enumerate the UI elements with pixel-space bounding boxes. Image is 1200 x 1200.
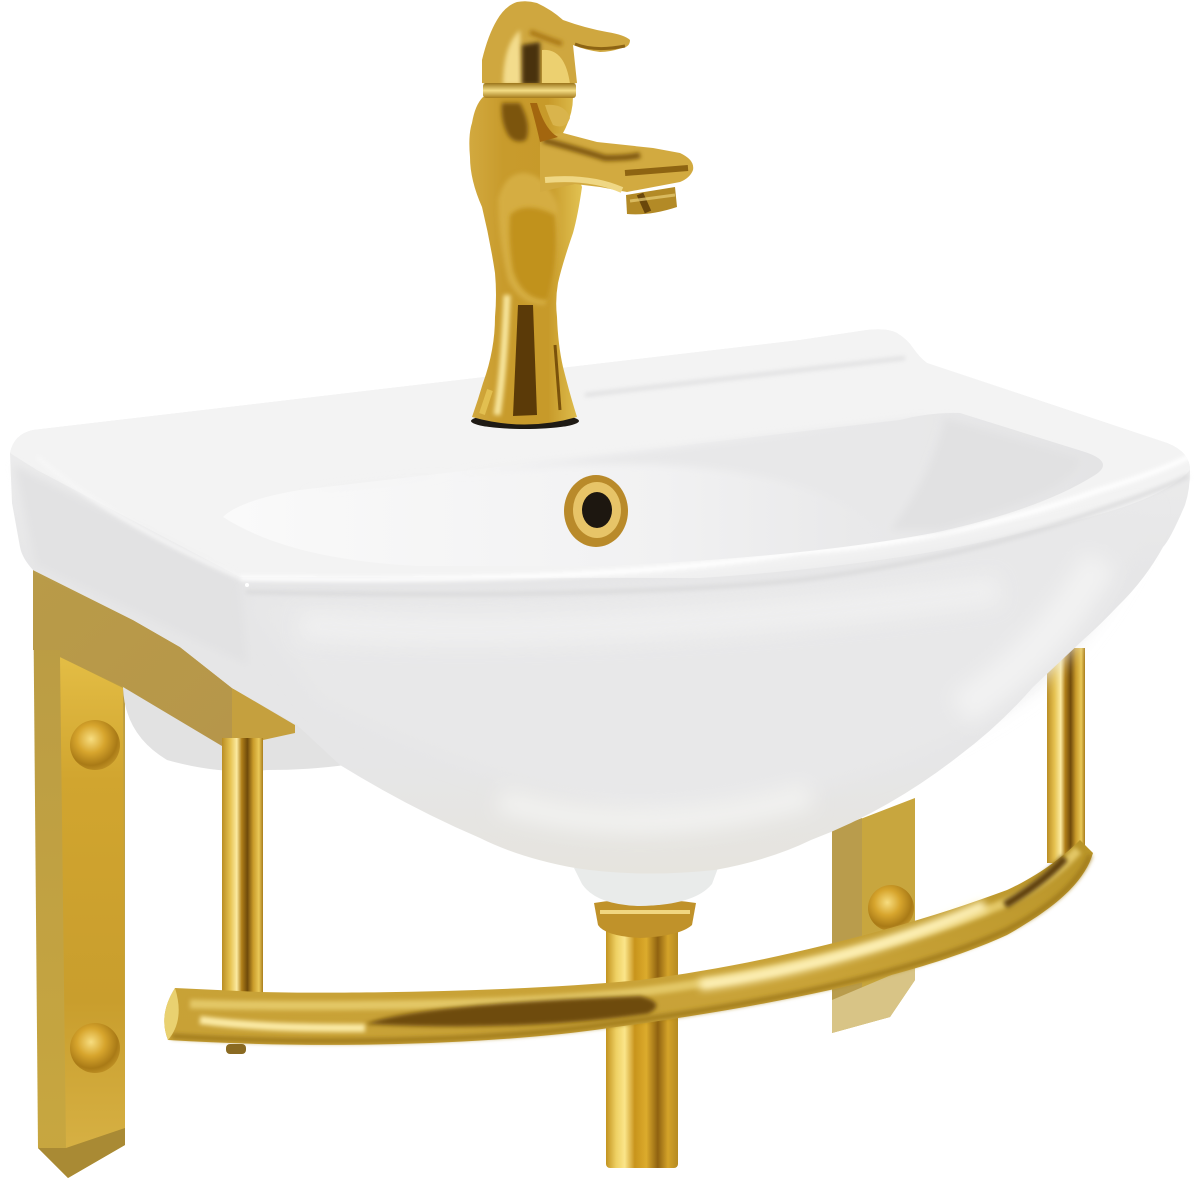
right vertical rod xyxy=(1047,648,1085,863)
towel bar end cap xyxy=(164,988,179,1040)
handle reflections xyxy=(503,30,522,85)
drain pipe xyxy=(574,868,718,1168)
bar highlight xyxy=(700,905,985,985)
spout reflections xyxy=(543,140,640,158)
drain gasket xyxy=(574,868,718,906)
bar lower edge xyxy=(172,855,1090,1041)
bar screw xyxy=(226,1044,246,1054)
sink outer body xyxy=(10,329,1190,874)
icon: left bracket upper bolt xyxy=(70,720,120,770)
rim ridge lines xyxy=(240,456,1190,579)
faucet body xyxy=(469,97,582,424)
towel bar xyxy=(164,840,1093,1054)
back of sink under arm xyxy=(123,688,345,771)
faucet base xyxy=(471,413,579,429)
right bowl highlight xyxy=(960,560,1100,710)
icon: left bracket lower bolt xyxy=(70,1023,120,1073)
sink rim top surface xyxy=(10,329,1190,578)
icon: overflow ring xyxy=(564,475,628,547)
body base reflections xyxy=(513,305,537,416)
left support arm xyxy=(33,570,295,752)
back ledge line xyxy=(585,358,905,395)
sink rim front face shading xyxy=(14,465,248,665)
bar left reflection xyxy=(200,1020,365,1028)
bar dark reflection xyxy=(365,996,656,1026)
basin back wall xyxy=(300,418,925,530)
handle lower lip xyxy=(575,44,625,49)
sink front shading xyxy=(250,510,1150,820)
specular point xyxy=(245,583,249,587)
sink front highlight xyxy=(300,590,1000,630)
sink xyxy=(10,329,1190,874)
faucet aerator xyxy=(626,187,677,214)
faucet xyxy=(469,1,693,429)
drain collar xyxy=(594,899,696,938)
left vertical rod xyxy=(222,738,263,1012)
basin right wall xyxy=(890,418,1080,530)
basin interior xyxy=(223,413,1103,566)
lower bowl highlight xyxy=(500,795,810,821)
faucet spout xyxy=(540,133,693,192)
body oval panel xyxy=(498,173,559,305)
bar light band xyxy=(190,850,1078,1006)
right wall bracket xyxy=(832,798,915,1033)
sink rim crease xyxy=(37,457,240,577)
bar right reflection xyxy=(1005,858,1065,905)
left wall bracket xyxy=(33,570,125,1178)
icon: right bracket bolt xyxy=(868,885,914,931)
faucet handle lever xyxy=(482,1,630,88)
neck reflections xyxy=(502,103,528,142)
handle collar ring xyxy=(483,83,576,98)
